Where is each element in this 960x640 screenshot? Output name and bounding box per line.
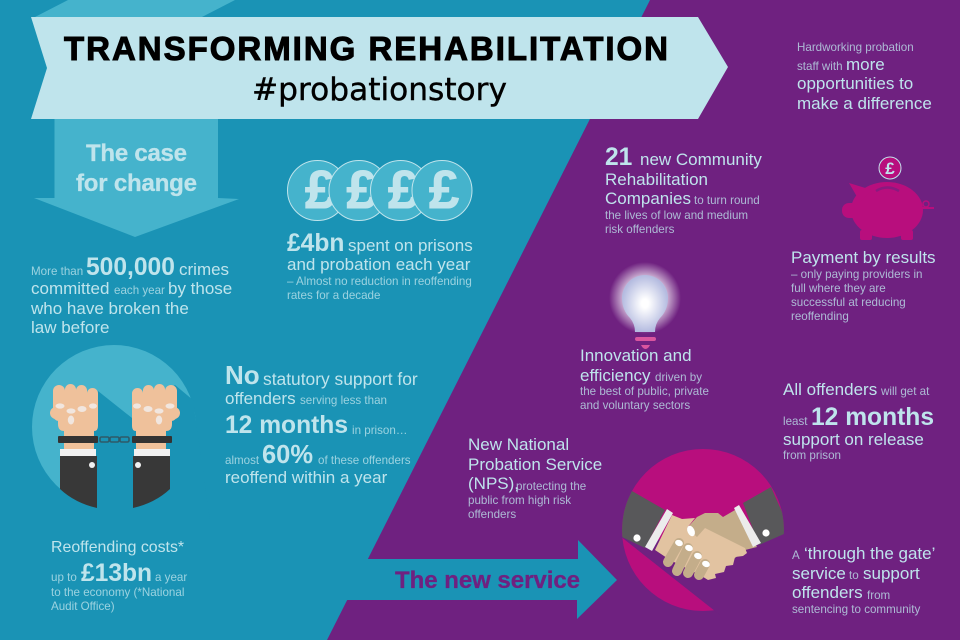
text: no statutory support: offenders <box>225 389 296 408</box>
text: 4bn spending: rates for a decade <box>287 289 380 302</box>
text: through the gate: offenders <box>792 583 863 602</box>
text: all offenders 12 months: 12 months <box>811 404 934 431</box>
text: through the gate: service <box>792 564 846 583</box>
title banner <box>31 17 728 119</box>
text: no statutory support: reoffend within a year <box>225 468 388 487</box>
text: innovation and efficiency: the best of public, private <box>580 385 709 398</box>
text: through the gate: A <box>792 549 800 562</box>
text: all offenders 12 months: support on release <box>783 430 924 449</box>
text: 500,000 crimes: each year <box>114 284 165 297</box>
text: 4bn spending <box>287 230 473 302</box>
text: 4bn spending: spent on prisons <box>348 236 473 255</box>
text: through the gate: ‘through the gate’ <box>804 544 935 563</box>
illustration: handshake <box>615 449 790 615</box>
text: 500,000 crimes: 500,000 <box>86 254 175 281</box>
text: through the gate: to <box>849 569 859 582</box>
text: 500,000 crimes: who have broken the <box>30 299 189 318</box>
title: TRANSFORMING REHABILITATION <box>64 30 668 67</box>
hashtag: #probationstory <box>252 72 507 108</box>
text: no statutory support: No <box>225 360 260 390</box>
text: all offenders 12 months: All offenders <box>783 380 877 399</box>
text: payment by results: successful at reducing <box>791 296 906 309</box>
text: hardworking staff: opportunities to <box>797 74 913 93</box>
text: through the gate <box>792 544 935 616</box>
text: innovation and efficiency <box>580 346 709 412</box>
text: hardworking staff: Hardworking probation <box>797 41 914 54</box>
text: 500,000 crimes: by those <box>168 279 232 298</box>
text: 21 community rehabilitation companies: to turn round <box>694 194 760 207</box>
icon: pound coins: £ <box>346 160 377 220</box>
text: national probation service: offenders <box>468 508 516 521</box>
text: all offenders 12 months: least <box>783 415 808 428</box>
text: national probation service: public from high risk <box>468 494 571 507</box>
text: 21 community rehabilitation companies: new Community <box>640 150 762 169</box>
text: no statutory support: 60% <box>262 441 313 469</box>
text: hardworking staff: more <box>846 55 885 74</box>
arrow: the case for change <box>34 119 239 237</box>
arrow: the new service: The new service <box>395 567 580 594</box>
text: hardworking staff <box>797 41 932 113</box>
text: 4bn spending: – Almost no reduction in reoffending <box>287 275 472 288</box>
text: no statutory support: 12 months <box>225 412 348 439</box>
text: 500,000 crimes: More than <box>31 265 83 278</box>
text: 4bn spending: £4bn <box>287 230 344 257</box>
text: through the gate: sentencing to community <box>792 603 920 616</box>
text: 21 community rehabilitation companies: Companies <box>605 189 691 208</box>
text: no statutory support <box>225 360 418 487</box>
text: all offenders 12 months: from prison <box>783 449 841 462</box>
text: payment by results: Payment by results <box>791 248 936 267</box>
text: reoffending costs: £13bn <box>81 560 152 587</box>
text: innovation and efficiency: efficiency <box>580 366 651 385</box>
icon: pound coins <box>288 160 472 220</box>
icon: piggy bank with coin: £ <box>885 159 895 178</box>
text: innovation and efficiency: and voluntary sectors <box>580 399 690 412</box>
text: reoffending costs: Reoffending costs* <box>51 539 184 556</box>
arrow: the new service <box>300 540 617 619</box>
text: reoffending costs: to the economy (*National <box>51 586 184 599</box>
text: 21 community rehabilitation companies: Rehabilitation <box>605 170 708 189</box>
arrow: the case for change: The case <box>86 140 187 167</box>
arrow: the case for change: for change <box>76 170 197 197</box>
icon: piggy bank with coin <box>842 157 934 240</box>
text: innovation and efficiency: driven by <box>655 371 702 384</box>
text: 500,000 crimes: committed <box>31 279 109 298</box>
text: national probation service: Probation Service <box>468 455 602 474</box>
text: no statutory support: serving less than <box>300 394 387 407</box>
text: 21 community rehabilitation companies: the lives of low and medium <box>605 209 748 222</box>
text: national probation service <box>468 435 602 521</box>
text: no statutory support: statutory support for <box>263 369 418 389</box>
icon: pound coins: £ <box>388 160 418 220</box>
text: reoffending costs: Audit Office) <box>51 600 115 613</box>
text: payment by results <box>791 248 936 323</box>
text: no statutory support: in prison… <box>352 424 407 437</box>
text: national probation service: (NPS), <box>468 474 519 493</box>
text: no statutory support: almost <box>225 454 260 467</box>
text: 500,000 crimes: crimes <box>179 260 229 279</box>
text: all offenders 12 months <box>783 380 934 462</box>
text: through the gate: from <box>867 589 890 602</box>
text: reoffending costs <box>51 539 187 613</box>
text: no statutory support: of these offenders <box>318 454 411 467</box>
text: national probation service: New National <box>468 435 569 454</box>
text: payment by results: – only paying providers in <box>791 268 922 281</box>
text: hardworking staff: make a difference <box>797 94 932 113</box>
text: payment by results: reoffending <box>791 310 849 323</box>
icon: light bulb <box>609 262 681 349</box>
illustration: handcuffed hands <box>32 345 210 520</box>
ribbon fold <box>35 0 235 17</box>
text: hardworking staff: staff with <box>797 60 843 73</box>
text: payment by results: full where they are <box>791 282 886 295</box>
text: 500,000 crimes: law before <box>31 318 109 337</box>
text: 21 community rehabilitation companies: risk offenders <box>605 223 675 236</box>
text: through the gate: support <box>863 564 920 583</box>
text: 21 community rehabilitation companies <box>605 144 762 236</box>
text: reoffending costs: up to <box>51 571 77 584</box>
text: reoffending costs: a year <box>155 571 187 584</box>
text: all offenders 12 months: will get at <box>880 385 930 398</box>
text: 500,000 crimes <box>30 254 232 337</box>
text: innovation and efficiency: Innovation and <box>580 346 692 365</box>
text: 21 community rehabilitation companies: 21 <box>605 144 632 171</box>
text: 4bn spending: and probation each year <box>287 255 471 274</box>
icon: pound coins: £ <box>429 160 459 220</box>
background: purple side <box>327 0 960 640</box>
icon: pound coins: £ <box>305 160 335 220</box>
text: national probation service: protecting the <box>516 480 586 493</box>
